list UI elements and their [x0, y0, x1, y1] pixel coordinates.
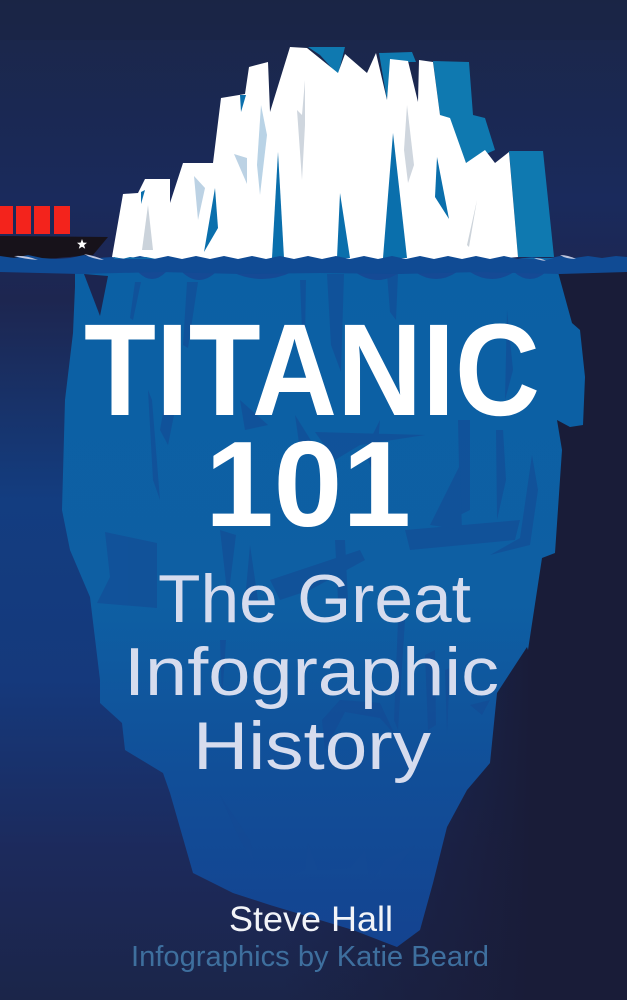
scallops under the waterline: [138, 272, 546, 280]
subtitle: The Great Infographic History: The Great: [158, 561, 471, 637]
subtitle: The Great Infographic History: Infographic: [124, 634, 499, 710]
iceberg: underwater mass: [62, 265, 585, 947]
subtitle: The Great Infographic History: [124, 561, 499, 784]
iceberg: blue crevices: [141, 95, 449, 258]
ship: Titanic: [0, 206, 108, 259]
iceberg: pale shadow facets: [142, 80, 477, 250]
title: 101: 101: [205, 416, 411, 552]
underwater fissures: [97, 274, 538, 885]
wave teal glints: [114, 257, 554, 260]
ship funnels: [0, 206, 70, 234]
ship hull: [0, 236, 108, 259]
iceberg: above-water white face: [112, 47, 518, 260]
ship star: [77, 239, 87, 249]
title: TITANIC: TITANIC: [84, 296, 540, 443]
notch in underwater ice: [84, 274, 108, 316]
sea surface band: [0, 254, 627, 274]
iceberg: above-water back faces: [308, 47, 554, 257]
author: Steve Hall: Steve Hall: [229, 900, 393, 939]
wave crests: [14, 254, 576, 261]
subtitle: The Great Infographic History: History: [193, 708, 431, 784]
credit: Infographics by Katie Beard: Infographics by Katie Beard: [131, 941, 489, 973]
